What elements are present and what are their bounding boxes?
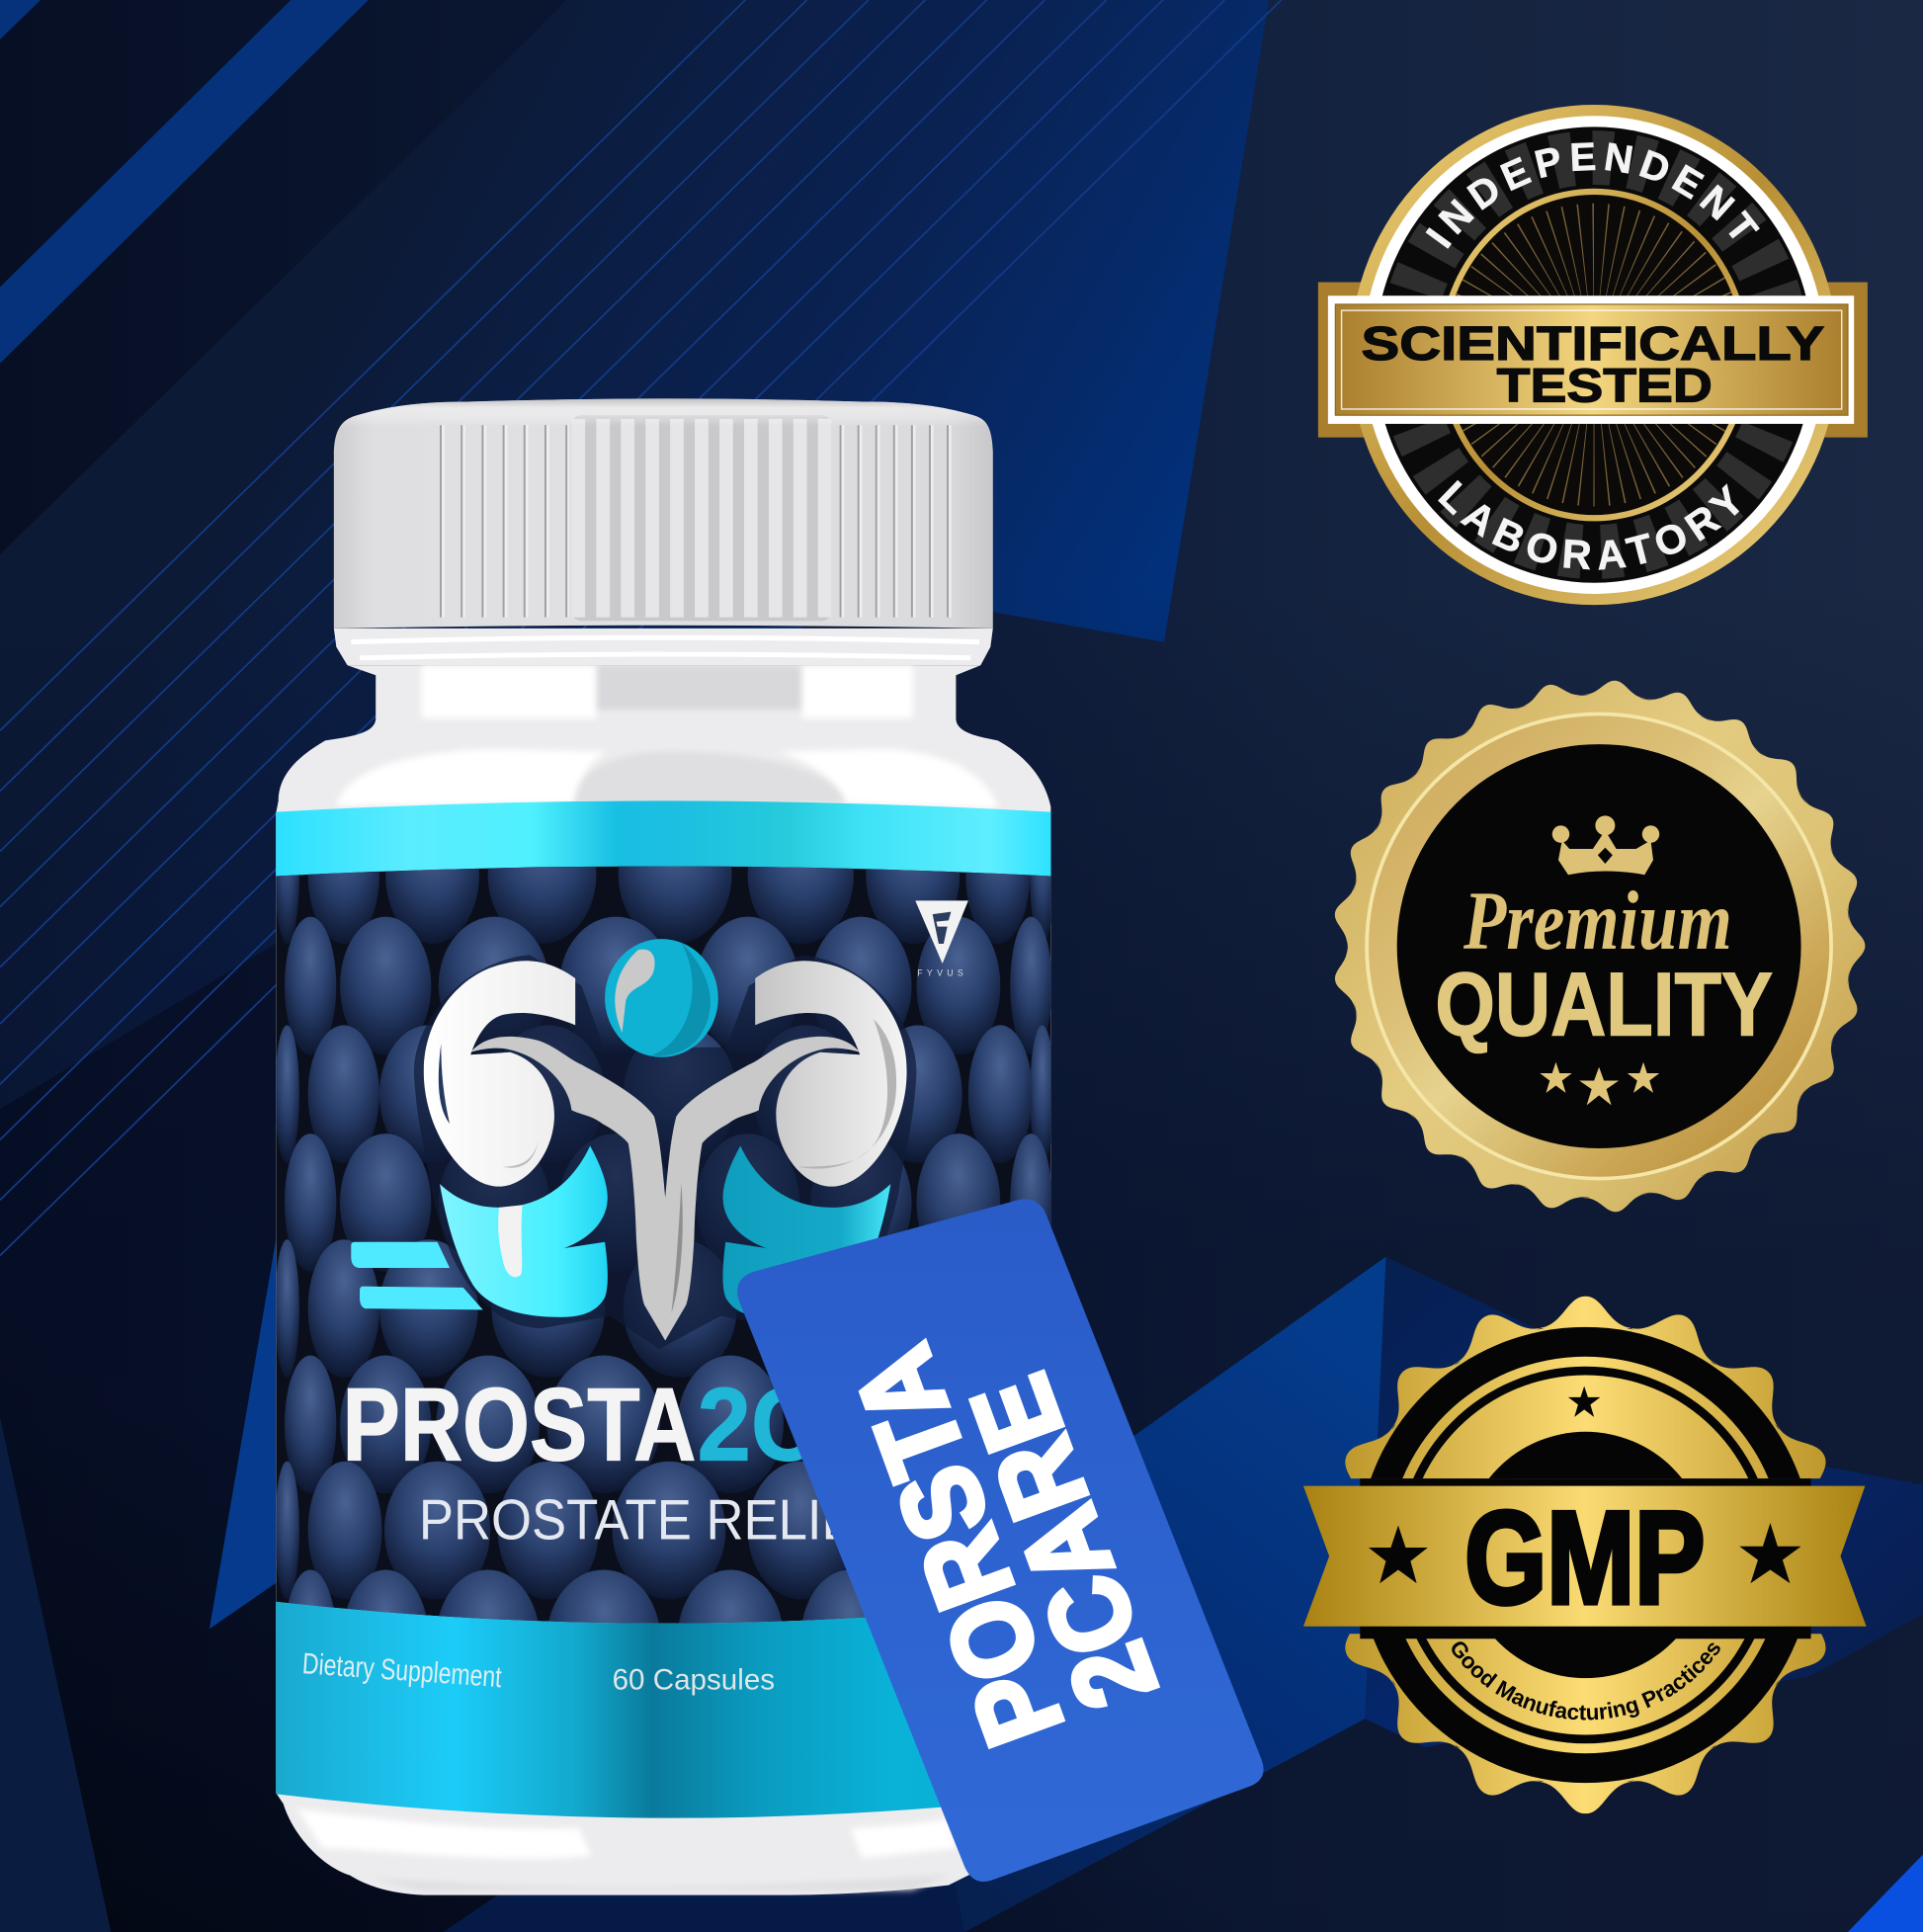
bottle body and shoulders bbox=[276, 665, 1050, 1895]
label with scale pattern and logo bbox=[276, 866, 1051, 1624]
badge: GMP bbox=[1303, 1297, 1867, 1814]
dark ring bbox=[1375, 126, 1813, 583]
card name line 1: PORSTA bbox=[829, 1331, 1087, 1761]
curved caption: Good Manufacturing Practices bbox=[1452, 1641, 1720, 1720]
neck highlights bbox=[421, 665, 913, 718]
blue product card bbox=[737, 1199, 1264, 1882]
top star bbox=[1568, 1386, 1600, 1417]
left star bbox=[1369, 1526, 1428, 1583]
left kidney bbox=[424, 961, 575, 1187]
bottle cap bbox=[334, 398, 993, 660]
scalloped gold seal bbox=[1345, 1297, 1826, 1814]
shoulder highlights bbox=[336, 749, 998, 808]
card name line 2: 2CARE bbox=[947, 1361, 1180, 1723]
scalloped gold seal bbox=[1328, 675, 1870, 1218]
product name: 2C bbox=[698, 1367, 820, 1482]
front ribbon bbox=[1328, 295, 1854, 424]
product name: PROSTA bbox=[343, 1367, 696, 1482]
ribbon headline line 2: TESTED bbox=[1497, 359, 1713, 412]
product subtitle: PROSTATE RELIEF bbox=[419, 1488, 888, 1552]
cyan sphere bbox=[605, 939, 718, 1057]
crown icon bbox=[1552, 815, 1659, 875]
base highlights bbox=[296, 1808, 956, 1890]
FYVUS brand mark: FYVUS bbox=[917, 967, 967, 977]
grey ureter branches bbox=[470, 1037, 860, 1341]
inner sunburst disc bbox=[1439, 189, 1749, 521]
GMP letters: GMP bbox=[1464, 1484, 1705, 1632]
premium script: Premium bbox=[1463, 875, 1732, 967]
cap rim bbox=[334, 629, 993, 665]
arc label bottom: LABORATORY bbox=[1438, 480, 1739, 570]
right kidney bbox=[755, 961, 907, 1187]
three stars bbox=[1540, 1062, 1659, 1105]
capsule count: 60 Capsules bbox=[613, 1663, 775, 1696]
bottom cyan band bbox=[276, 1602, 1050, 1818]
dark halo behind logo bbox=[414, 955, 916, 1349]
cyan right leaf bbox=[722, 1146, 890, 1317]
badge: premium quality bbox=[1328, 675, 1870, 1218]
product bottle bbox=[275, 398, 1054, 1895]
anatomical kidney logo bbox=[351, 939, 916, 1349]
dietary supplement label: Dietary Supplement bbox=[301, 1647, 503, 1694]
top cyan band bbox=[276, 800, 1050, 876]
right star bbox=[1739, 1523, 1801, 1583]
FYVUS brand mark bbox=[915, 900, 968, 977]
quality heading: QUALITY bbox=[1435, 955, 1773, 1054]
speed lines bbox=[351, 1242, 450, 1268]
ribbon headline line 1: SCIENTIFICALLY bbox=[1362, 317, 1824, 371]
outer gold rim bbox=[1350, 105, 1838, 605]
arc label top: INDEPENDENT bbox=[1425, 142, 1760, 249]
gold ribbon bbox=[1303, 1486, 1867, 1627]
cyan left leaf bbox=[440, 1146, 608, 1317]
rear gold ribbon bbox=[1318, 283, 1868, 438]
badge: scientifically tested bbox=[1318, 105, 1868, 605]
